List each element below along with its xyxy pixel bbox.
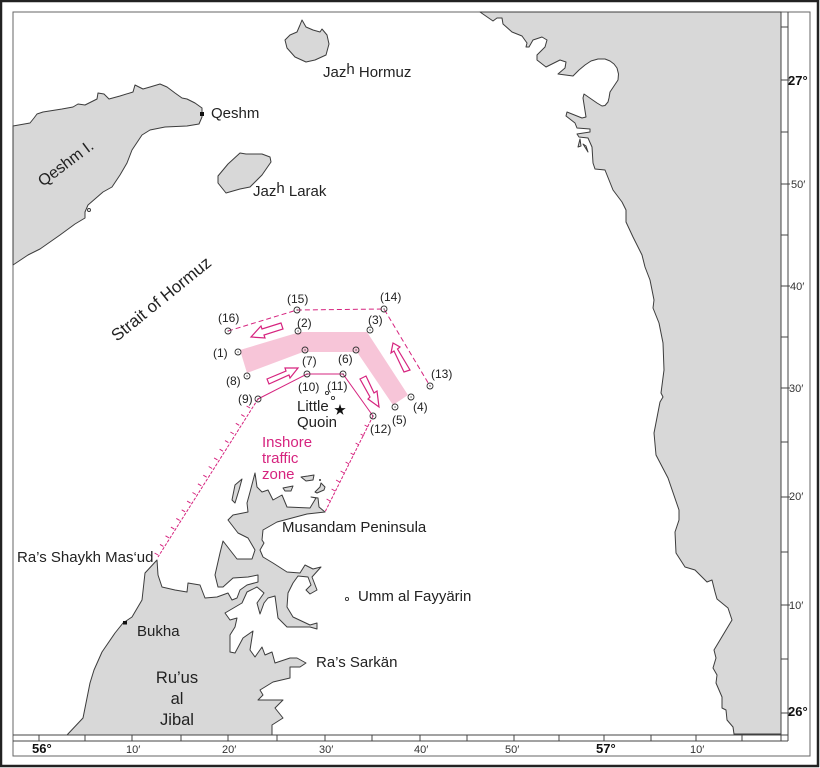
waypoint numbers: (14) bbox=[380, 290, 401, 304]
bottom scale labels: 57° bbox=[596, 741, 616, 756]
label: Jazirat Larak: Jaz bbox=[253, 183, 276, 200]
waypoint numbers: (10) bbox=[298, 380, 319, 394]
islets near Little Quoin bbox=[325, 391, 335, 400]
right scale labels: 40′ bbox=[790, 281, 804, 293]
label: Inshore traffic zone: traffic bbox=[262, 450, 299, 467]
waypoint numbers: (13) bbox=[431, 367, 452, 381]
land: Musandam Peninsula bbox=[67, 473, 325, 735]
label: Little Quoin: Quoin bbox=[297, 414, 337, 431]
label: Jazirat Hormuz: Hormuz bbox=[355, 64, 411, 81]
waypoint numbers: (2) bbox=[297, 316, 312, 330]
icon: islet off Qeshm bbox=[88, 208, 90, 212]
right scale labels bbox=[788, 73, 808, 719]
waypoint numbers: (4) bbox=[413, 400, 428, 414]
arrow: north-west bound lane bbox=[391, 343, 410, 372]
right scale labels: 20′ bbox=[789, 491, 803, 503]
bottom scale labels bbox=[32, 741, 704, 756]
land: Iranian coast bbox=[480, 12, 781, 734]
icon: Bukha town marker bbox=[123, 621, 127, 624]
label: Ra's Sarkan: Ra’s Sarkän bbox=[316, 654, 397, 671]
label: Inshore traffic zone: Inshore bbox=[262, 434, 312, 451]
bottom scale labels: 56° bbox=[32, 741, 52, 756]
waypoint numbers: (1) bbox=[213, 346, 228, 360]
label: Ru'us al Jibal: Jibal bbox=[160, 711, 194, 729]
waypoint numbers: (9) bbox=[238, 392, 253, 406]
right scale labels: 26° bbox=[788, 704, 808, 719]
label: Ru'us al Jibal: al bbox=[171, 690, 183, 708]
icon: star on Little Quoin bbox=[334, 404, 346, 415]
bottom scale labels: 10′ bbox=[126, 744, 140, 756]
waypoint numbers: (11) bbox=[327, 379, 347, 393]
label: Jazirat Hormuz: Jaz bbox=[323, 64, 346, 81]
label: Jazirat Hormuz: h bbox=[346, 61, 355, 78]
land: Jazirat Hormuz bbox=[285, 20, 329, 62]
land: small islands off Iranian coast bbox=[578, 139, 588, 152]
label: Umm al Fayyarin: Umm al Fayyärin bbox=[358, 588, 471, 605]
icon: islet Umm al Fayyarin bbox=[345, 597, 349, 601]
right scale labels: 30′ bbox=[789, 383, 803, 395]
label: Strait of Hormuz: Strait of Hormuz bbox=[108, 253, 215, 345]
waypoint numbers: (8) bbox=[226, 374, 241, 388]
label: Qeshm I.: Qeshm I. bbox=[35, 138, 97, 190]
arrow: eastbound lane bbox=[267, 368, 298, 384]
bottom scale labels: 40′ bbox=[414, 744, 428, 756]
right scale labels: 27° bbox=[788, 73, 808, 88]
bottom scale labels: 20′ bbox=[222, 744, 236, 756]
outer traffic lane boundary bbox=[228, 309, 430, 386]
waypoint numbers: (3) bbox=[368, 313, 383, 327]
land: Jazirat Larak bbox=[218, 153, 271, 193]
label: Jazirat Larak: h bbox=[276, 180, 285, 197]
route waypoints bbox=[225, 306, 433, 419]
waypoint numbers: (15) bbox=[287, 292, 308, 306]
land: Qeshm Island bbox=[13, 84, 202, 265]
label: Ra's Shaykh Mas'ud: Ra’s Shaykh Mas‘ud bbox=[17, 549, 153, 566]
waypoint numbers bbox=[213, 290, 452, 436]
right scale labels: 50′ bbox=[791, 179, 805, 191]
label: Musandam Peninsula: Musandam Peninsula bbox=[282, 519, 427, 536]
waypoint numbers: (12) bbox=[370, 422, 391, 436]
label: Jazirat Larak: Larak bbox=[285, 183, 327, 200]
waypoint numbers: (5) bbox=[392, 413, 407, 427]
bottom scale labels: 50′ bbox=[505, 744, 519, 756]
arrow: south-east bound lane bbox=[360, 376, 379, 407]
arrow: westbound lane bbox=[251, 323, 283, 338]
bottom scale labels: 10′ bbox=[690, 744, 704, 756]
icon: Qeshm town marker bbox=[200, 112, 204, 116]
waypoint numbers: (7) bbox=[302, 354, 317, 368]
label: Qeshm: Qeshm bbox=[211, 105, 259, 122]
waypoint numbers: (16) bbox=[218, 311, 239, 325]
inner traffic lane boundary bbox=[258, 374, 373, 416]
land: small Musandam islands bbox=[232, 475, 325, 503]
right scale labels: 10′ bbox=[789, 600, 803, 612]
traffic lane: pink separation zone bbox=[240, 332, 408, 405]
label: Bukha: Bukha bbox=[137, 623, 180, 640]
label: Inshore traffic zone: zone bbox=[262, 466, 295, 483]
waypoint numbers: (6) bbox=[338, 352, 353, 366]
label: Ru'us al Jibal: Ru’us bbox=[156, 669, 198, 687]
inshore traffic zone boundaries bbox=[155, 399, 373, 557]
label: Little Quoin: Little bbox=[297, 398, 329, 415]
bottom scale labels: 30′ bbox=[319, 744, 333, 756]
